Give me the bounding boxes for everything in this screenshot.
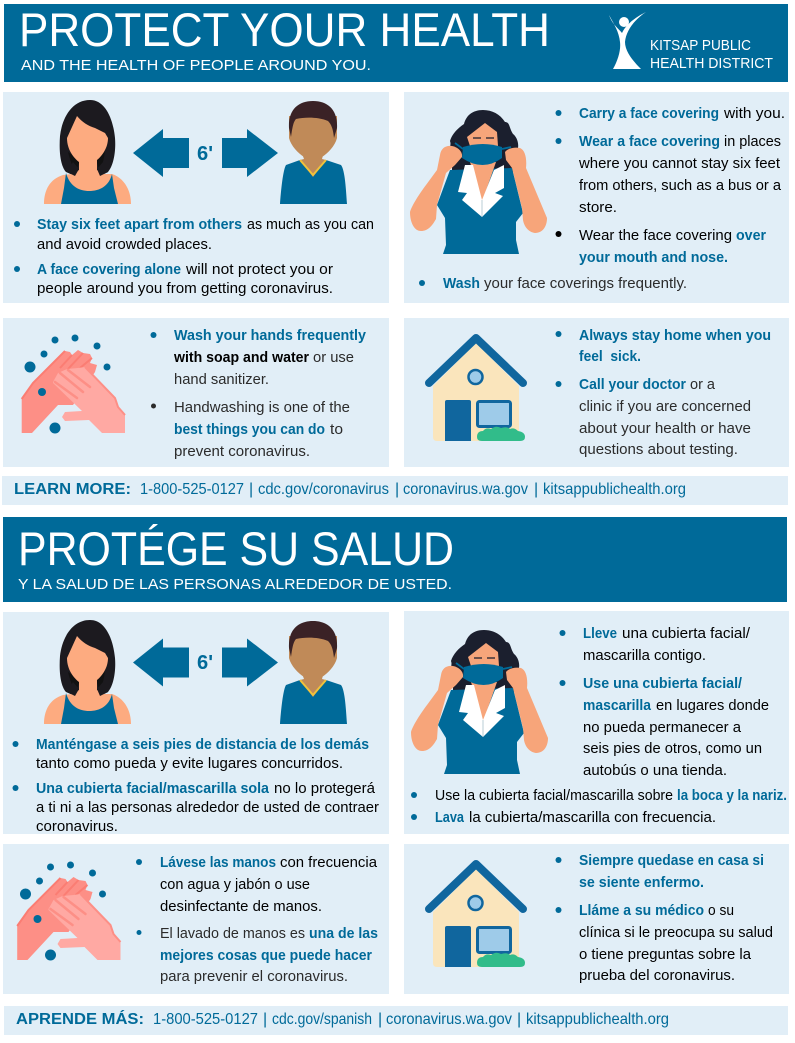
text: use una cubierta [560,676,769,779]
text: handwashing is one of the best things: best things you can do [174,422,325,438]
text: handwashing is one of the best things: prevent coronavirus. [174,444,310,460]
text: call your doctor [556,377,751,458]
text: sobre la boca y la nariz [411,788,787,804]
text: manténgase a seis pies: Manténgase a seis pies de distancia de los demás [36,737,369,753]
title: PROTÉGE SU SALUD [18,522,454,575]
text: wear a face covering: where you cannot stay six feet [578,156,780,172]
text: over your mouth and nose: your mouth and nose. [579,250,728,266]
text: carry a face covering [556,106,785,122]
text: manténgase a seis pies [12,737,369,772]
text: wash your face coverings: Wash [443,276,480,292]
text: over your mouth and nose [556,228,766,266]
footer bar: learn more: | [249,481,253,498]
text: wash your hands frequently: Wash your hands frequently [174,328,367,344]
text: use una cubierta: autobús o una tienda. [583,763,727,779]
text: wash your hands frequently [150,328,367,388]
logo: Kitsap Public Health District [609,12,773,72]
text: una cubierta facial sola: coronavirus. [36,819,118,835]
text: lláme a su médico [556,903,773,984]
text: use una cubierta: en lugares donde [656,698,769,714]
text: handwashing is one of the best things: to [330,422,343,438]
text: lávese las manos: con frecuencia [280,855,378,871]
text: wear a face covering: from others, such as a bus or a [579,178,782,194]
text: lleve una cubierta: mascarilla contigo. [583,648,706,664]
arrows: six feet distance [133,638,278,686]
text: siempre quedase en casa [556,853,764,891]
footer bar: aprende más: 1-800-525-0127 [153,1011,258,1028]
text: el lavado de manos: El lavado de manos es [160,926,305,942]
arrows: six feet distance: 6' [197,652,213,674]
text: stay six feet apart: Stay six feet apart from others [37,217,242,233]
text: wear a face covering: in places [724,134,781,150]
text: use una cubierta: no pueda permanecer a [583,720,742,736]
text: call your doctor: about your health or have [579,421,751,437]
text: over your mouth and nose: Wear the face covering [579,228,732,244]
text: a face covering alone: people around you from getting coronavirus. [37,281,333,297]
text: carry a face covering: with you. [723,106,785,122]
text: lláme a su médico: o su [708,903,734,919]
text: call your doctor: or a [690,377,716,393]
subtitle: Y LA SALUD DE LAS PERSONAS ALREDEDOR DE USTED. [18,576,452,593]
panel: lavado de manos [3,844,389,994]
text: wear a face covering [556,134,782,216]
text: lávese las manos: con agua y jabón o use [160,877,310,893]
text: always stay home: feel sick. [579,349,641,365]
footer bar: aprende más: | [263,1011,267,1028]
text: wear a face covering: store. [579,200,617,216]
text: wash your face coverings: your face coverings frequently. [484,276,687,292]
footer bar: aprende más: | [517,1011,521,1028]
footer bar: learn more: | [534,481,538,498]
text: a face covering alone [14,262,333,297]
footer bar: aprende más: kitsappublichealth.org [526,1011,669,1028]
text: una cubierta facial sola: a ti ni a las personas alrededor de usted de contraer [36,800,379,816]
icon: house [429,864,525,967]
text: el lavado de manos [136,926,378,985]
footer bar: learn more: | [395,481,399,498]
text: call your doctor: clinic if you are concerned [579,399,751,415]
footer bar: aprende más: | [378,1011,382,1028]
footer bar: learn more: 1-800-525-0127 [140,481,244,498]
icon: man [280,101,347,204]
text: siempre quedase en casa: se siente enfermo. [579,875,704,891]
text: wash your hands frequently: hand sanitizer. [174,372,269,388]
panel: stay home [404,318,789,467]
logo: Kitsap Public Health District: HEALTH DISTRICT [650,55,773,72]
title: PROTECT YOUR HEALTH [19,3,550,56]
text: una cubierta facial sola [12,781,379,835]
panel: seis pies [3,612,389,835]
text: stay six feet apart [14,217,374,253]
text: a face covering alone: A face covering alone [37,262,181,278]
text: stay six feet apart: and avoid crowded places. [37,237,212,253]
arrows: six feet distance: 6' [197,143,213,165]
text: lávese las manos [136,855,378,915]
text: use una cubierta: mascarilla [583,698,652,714]
icon: washing hands [22,334,125,434]
text: call your doctor: questions about testing. [579,442,738,458]
text: handwashing is one of the best things: Handwashing is one of the [174,400,350,416]
text: el lavado de manos: una de las [309,926,378,942]
text: una cubierta facial sola: no lo protegerá [274,781,376,797]
panel: hand washing [3,318,389,467]
text: lávese las manos: desinfectante de manos. [160,899,322,915]
panel: quedarse en casa [404,844,789,994]
text: over your mouth and nose: over [736,228,766,244]
footer bar: learn more: kitsappublichealth.org [543,481,686,498]
footer bar: aprende más: coronavirus.wa.gov [386,1011,512,1028]
footer bar: learn more: LEARN MORE: [14,481,131,498]
footer bar: aprende más: cdc.gov/spanish [272,1011,372,1028]
icon: house [429,338,525,441]
footer bar: learn more: coronavirus.wa.gov [403,481,528,498]
panel: cubiertas faciales [404,611,789,834]
text: manténgase a seis pies: tanto como pueda y evite lugares concurridos. [36,756,343,772]
text: a face covering alone: will not protect you or [185,262,333,278]
icon: woman adjusting mask [410,110,547,254]
text: handwashing is one of the best things [151,400,350,460]
text: el lavado de manos: para prevenir el coronavirus. [160,969,348,985]
icon: woman adjusting mask [411,630,548,774]
footer bar: learn more [2,476,788,505]
text: wash your hands frequently: or use [313,350,354,366]
icon: woman [44,100,131,204]
text: lleve una cubierta [560,626,751,664]
text: lava la cubierta: la cubierta/mascarilla con frecuencia. [469,810,716,826]
panel: six feet apart [3,92,389,303]
text: always stay home: Always stay home when you [579,328,771,344]
text: carry a face covering: Carry a face covering [579,106,719,122]
header: Spanish [3,517,787,602]
text: call your doctor: Call your doctor [579,377,686,393]
text: stay six feet apart: as much as you can [247,217,374,233]
text: lláme a su médico: prueba del coronavirus. [579,968,735,984]
icon: man [280,621,347,724]
text: use una cubierta: Use una cubierta facial/ [583,676,742,692]
subtitle: AND THE HEALTH OF PEOPLE AROUND YOU. [21,57,371,74]
text: wash your hands frequently: with soap and water [173,350,309,366]
text: lláme a su médico: o tiene preguntas sobre la [579,947,752,963]
footer bar: aprende más [4,1006,788,1035]
text: wear a face covering: Wear a face covering [579,134,720,150]
text: sobre la boca y la nariz: Use la cubierta facial/mascarilla sobre [435,788,673,804]
text: lláme a su médico: Lláme a su médico [579,903,704,919]
logo: Kitsap Public Health District: KITSAP PUBLIC [650,37,751,54]
text: use una cubierta: seis pies de otros, como un [583,741,762,757]
text: lava la cubierta: Lava [435,810,465,826]
text: always stay home [556,328,771,365]
icon: woman [44,620,131,724]
footer bar: aprende más: APRENDE MÁS: [16,1011,144,1028]
text: lláme a su médico: clínica si le preocupa su salud [579,925,773,941]
header: English [4,3,788,82]
arrows: six feet distance [133,129,278,177]
footer bar: learn more: cdc.gov/coronavirus [258,481,389,498]
text: el lavado de manos: mejores cosas que puede hacer [160,948,372,964]
icon: washing hands [17,862,121,960]
text: lleve una cubierta: Lleve [583,626,617,642]
text: una cubierta facial sola: Una cubierta facial/mascarilla sola [36,781,270,797]
text: lleve una cubierta: una cubierta facial/ [622,626,751,642]
text: lávese las manos: Lávese las manos [160,855,276,871]
text: siempre quedase en casa: Siempre quedase en casa si [579,853,764,869]
panel: face coverings [404,92,789,303]
